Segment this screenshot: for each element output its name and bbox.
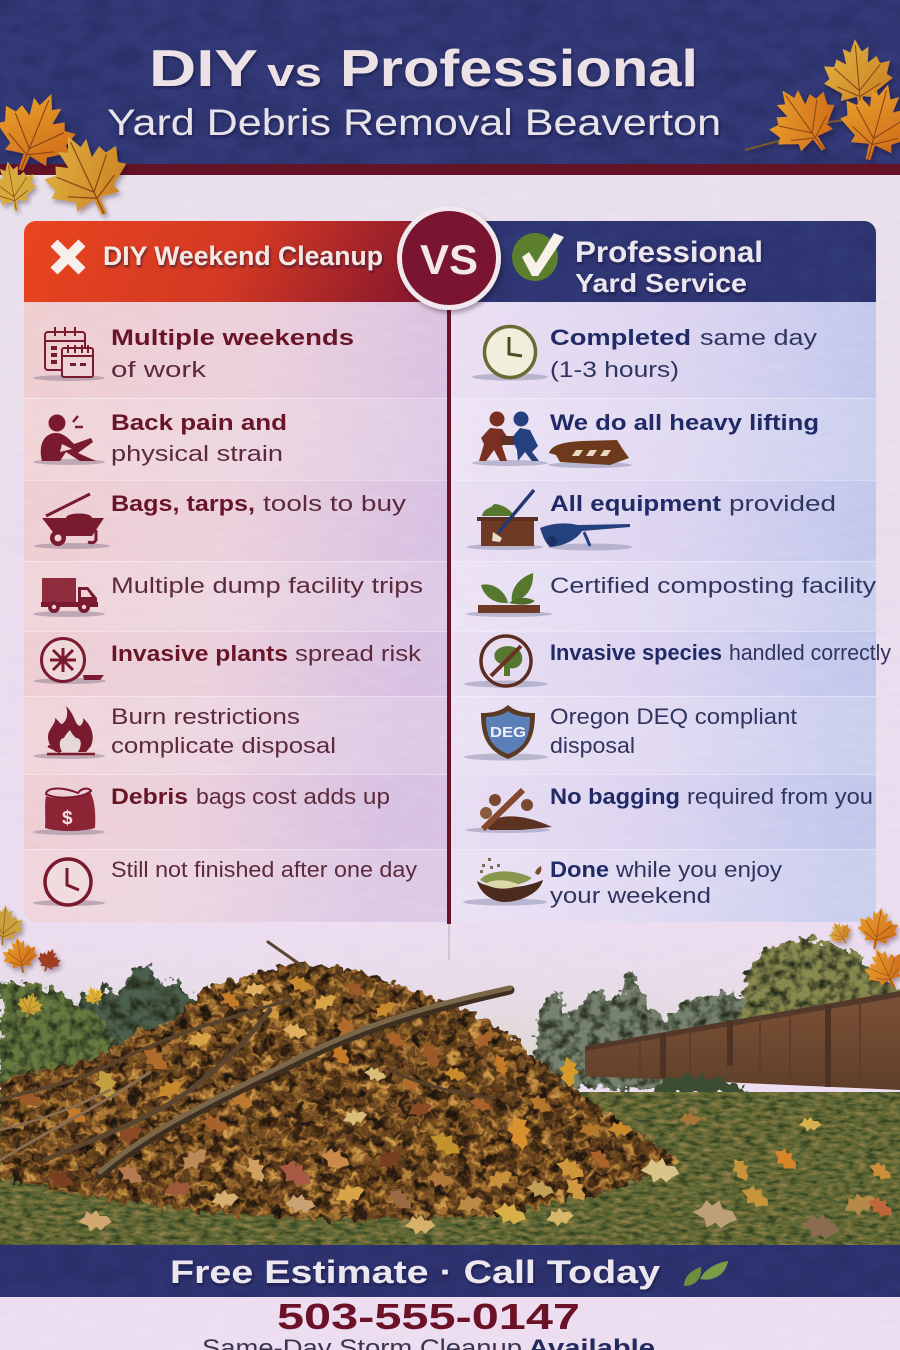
- hedge at fence: [650, 1075, 752, 1094]
- icon: sprout on soil: [466, 573, 552, 617]
- icon: green check: [512, 233, 564, 281]
- icon: olive clock: [472, 326, 548, 380]
- icon: branch and leaves: [466, 790, 552, 833]
- text: provided: [729, 491, 836, 516]
- icon: invasive plant: [34, 638, 106, 684]
- icon: clock: [33, 859, 105, 906]
- text: (1-3 hours): [550, 357, 679, 382]
- row 4 right: [466, 573, 876, 617]
- row 1 right: [472, 325, 817, 382]
- icon: dump truck: [33, 578, 105, 617]
- availability note: [202, 1335, 655, 1350]
- sky fade: [0, 930, 900, 1060]
- row 3 left: [34, 491, 406, 549]
- row 5 right: [464, 636, 891, 688]
- text: [550, 857, 782, 908]
- text: [550, 325, 817, 382]
- text: disposal: [550, 733, 635, 758]
- icon: DEQ shield: DEG: [490, 724, 526, 741]
- text: Multiple weekends: [111, 325, 354, 350]
- call to action: Free Estimate · Call Today: [170, 1254, 660, 1290]
- title: DIY: [149, 40, 258, 98]
- icon: money bag: [33, 789, 105, 835]
- text: [111, 491, 406, 516]
- DIY header: [24, 221, 876, 302]
- table texture: [24, 302, 876, 922]
- text: Burn restrictions: [111, 704, 300, 729]
- row 6 left: [33, 704, 336, 759]
- maroon rule: [0, 164, 900, 175]
- VS badge: VS: [420, 236, 478, 283]
- icon: DEQ shield: [464, 705, 548, 760]
- text: All equipment: [550, 491, 722, 516]
- text: physical strain: [111, 441, 283, 466]
- icon: leaf: [684, 1261, 728, 1286]
- photo: yard debris scene: [0, 930, 900, 1246]
- leaves on pile: [16, 972, 633, 1217]
- text: cost adds up: [252, 784, 390, 809]
- row 5 left: [34, 638, 422, 684]
- text: Invasive plants: [111, 641, 288, 666]
- icon: white X: [54, 243, 82, 271]
- icon: flame: [33, 706, 105, 759]
- heading: DIY Weekend Cleanup: DIY Weekend Cleanup: [103, 241, 383, 271]
- row 1 left: [33, 325, 354, 382]
- text: while you enjoy: [615, 857, 782, 882]
- leaves: lower left corner: [0, 903, 64, 976]
- heading: Professional Yard Service: Professional: [575, 236, 763, 269]
- row 7 right: [466, 784, 873, 833]
- comparison table: [24, 206, 891, 960]
- Professional header background: [450, 221, 876, 302]
- text: Oregon DEQ compliant: [550, 704, 797, 729]
- leaves on grass: [78, 1112, 897, 1242]
- icon: two workers and log pile: [472, 412, 632, 468]
- text: required from you: [687, 784, 873, 809]
- debris pile: [0, 942, 897, 1242]
- text: [550, 491, 836, 516]
- title: [149, 40, 698, 98]
- centre divider: [447, 302, 451, 924]
- text: of work: [111, 357, 207, 382]
- text: Back pain and: [111, 410, 287, 435]
- text: Still not finished after one day: [111, 857, 417, 882]
- text: [111, 784, 390, 809]
- text: Invasive species: [550, 640, 722, 665]
- text: [111, 410, 287, 466]
- grass: [0, 1092, 900, 1246]
- text: [550, 704, 797, 758]
- divider fade: [448, 924, 450, 960]
- text: complicate disposal: [111, 733, 336, 758]
- fence: [585, 991, 900, 1094]
- text: [550, 640, 891, 665]
- text: Completed: [550, 325, 691, 350]
- subtitle: Yard Debris Removal Beaverton: [107, 102, 721, 143]
- text: No bagging: [550, 784, 680, 809]
- phone number: 503-555-0147: [277, 1296, 580, 1337]
- text: [111, 325, 354, 382]
- heading: Professional Yard Service: Yard Service: [575, 268, 747, 298]
- row 8 left: [33, 857, 417, 906]
- icon: calendars: [33, 327, 105, 381]
- text: your weekend: [550, 883, 711, 908]
- text: [111, 704, 336, 758]
- row 6 right: [464, 704, 797, 760]
- title: vs: [267, 51, 322, 95]
- row 2 right: [472, 410, 819, 468]
- icon: money bag: $: [62, 808, 73, 829]
- leaves: lower right corner: [824, 904, 900, 996]
- VS badge: [397, 206, 501, 310]
- text: Multiple dump facility trips: [111, 573, 423, 598]
- text: We do all heavy lifting: [550, 410, 819, 435]
- branches: [0, 942, 510, 1175]
- distant trees: [75, 938, 900, 1090]
- text: Certified composting facility: [550, 573, 876, 598]
- icon: no invasive species: [464, 636, 548, 688]
- text: same day: [700, 325, 817, 350]
- row 4 left: [33, 573, 423, 617]
- row 3 right: [467, 490, 836, 550]
- text: tools to buy: [263, 491, 406, 516]
- leaves: top right: [745, 36, 900, 169]
- icon: wheelbarrow: [34, 494, 110, 549]
- text: handled correctly: [729, 640, 891, 665]
- heading: Professional Yard Service: [575, 236, 763, 298]
- text: [550, 784, 873, 809]
- text: Done: [550, 857, 609, 882]
- title: Professional: [340, 40, 698, 98]
- panel: DIY column: [24, 302, 447, 922]
- panel: Professional column: [451, 302, 876, 922]
- row 7 left: [33, 784, 390, 835]
- text: Bags, tarps,: [111, 491, 255, 516]
- left bush: [0, 982, 113, 1130]
- footer banner: [0, 1245, 900, 1297]
- leaves: top left: [0, 79, 142, 231]
- row 8 right: [463, 857, 782, 908]
- text: spread risk: [295, 641, 422, 666]
- icon: bowl: [463, 858, 547, 906]
- header banner: [0, 0, 900, 175]
- text: bags: [196, 784, 246, 809]
- text: Debris: [111, 784, 188, 809]
- row 2 left: [33, 410, 287, 466]
- icon: equipment: [467, 490, 632, 550]
- icon: sore person: [33, 414, 105, 465]
- text: [111, 641, 422, 666]
